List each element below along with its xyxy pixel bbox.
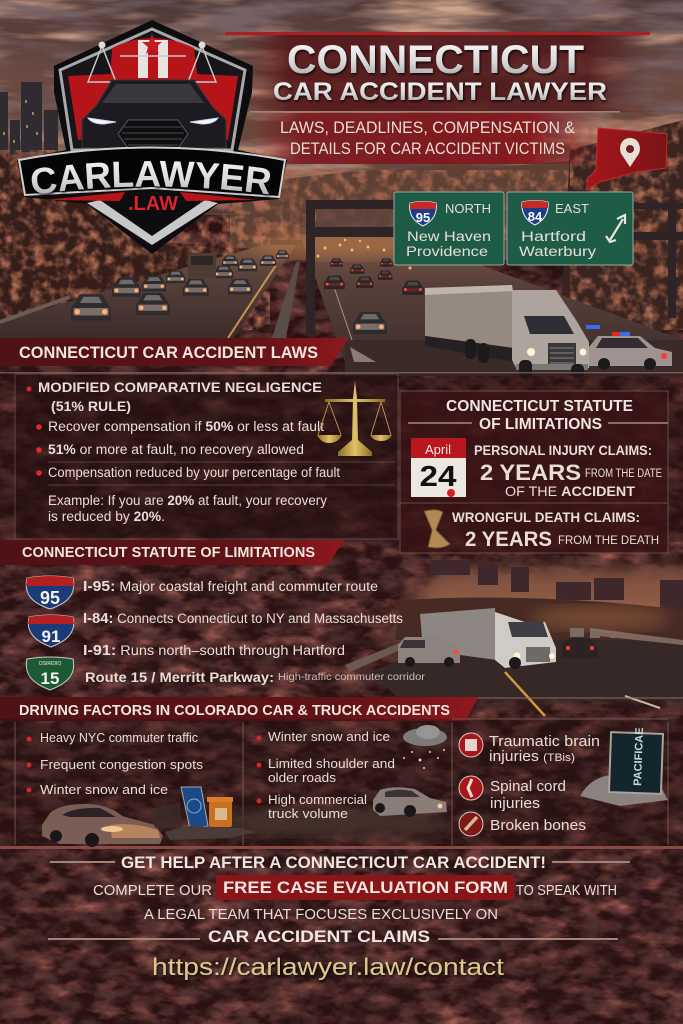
red tail-light car (562, 638, 598, 658)
section heading: Connecticut car accident laws (0, 338, 348, 366)
highway sign: I-84 East: EAST (555, 201, 589, 216)
subtitle band: LAWS, DEADLINES, COMPENSATION & (280, 119, 575, 137)
highway sign: I-84 East: Hartford (521, 229, 586, 244)
icon: calendar April 24: 24 (420, 461, 456, 493)
semi truck (425, 285, 589, 379)
highway sign: I-84 East: Waterbury (519, 244, 596, 259)
shield: I-95 (26, 576, 74, 609)
section: laws and statute background fill (0, 372, 683, 542)
panel heading (446, 398, 633, 433)
factor: older roads (268, 771, 336, 785)
panel heading: OF LIMITATIONS (479, 416, 602, 433)
personal injury claims: FROM THE DATE (585, 468, 662, 480)
section heading: statute of limitations: CONNECTICUT STATUTE OF LIMITATIONS (22, 545, 315, 561)
panel: comparative negligence (15, 374, 398, 539)
illustration: road sign in snow: PACIFICAE (632, 727, 646, 786)
overhead gantry (306, 200, 683, 335)
bullet: 50 percent: Recover compensation if 50% or less at fault (48, 419, 324, 434)
distant town haze (230, 150, 683, 260)
wrongful death claims: FROM THE DEATH (558, 533, 659, 547)
route: I-91 text: I-91: Runs north–south through Hartford (83, 642, 345, 659)
cta line: claims: CAR ACCIDENT CLAIMS (208, 927, 430, 946)
injury text (490, 779, 566, 812)
panel: road factors (256, 725, 447, 821)
injury text: injuries (490, 796, 540, 812)
personal injury claims: OF THE ACCIDENT (505, 483, 635, 499)
injury text: Broken bones (490, 818, 586, 834)
injury text: Traumatic brain (489, 734, 600, 750)
factor: Limited shoulder and (268, 757, 395, 771)
factor: truck volume (268, 807, 348, 821)
negligence heading: MODIFIED COMPARATIVE NEGLIGENCE (38, 379, 322, 395)
route: I-95 text: I-95: Major coastal freight and commuter route (83, 578, 378, 595)
personal injury claims: PERSONAL INJURY CLAIMS: (474, 442, 652, 458)
shield: I-95: 95 (40, 588, 60, 608)
subtitle band: DETAILS FOR CAR ACCIDENT VICTIMS (290, 140, 565, 158)
icon: hourglass (424, 510, 450, 548)
highway surfaces (0, 245, 296, 340)
example: is reduced by 20%. (48, 509, 165, 524)
shield: Route 15: 15 (41, 669, 59, 688)
wrongful death claims: 2 YEARS (465, 528, 552, 551)
left hillside trees (0, 150, 270, 330)
icon: spine injury (459, 776, 483, 800)
highway sign: I-95 North: Providence (406, 244, 488, 259)
cta line: legal team: A LEGAL TEAM THAT FOCUSES EXCLUSIVELY ON (144, 906, 498, 923)
panel: statute of limitations (400, 391, 668, 553)
panel heading: CONNECTICUT STATUTE (446, 398, 633, 415)
police car (586, 325, 672, 370)
route: Route 15 description: High-traffic commuter corridor (278, 671, 426, 683)
injury text: injuries (TBis) (489, 749, 575, 765)
icon: calendar April 24: April (425, 442, 451, 457)
title banner (225, 32, 650, 112)
personal injury claims: 2 YEARS (480, 460, 581, 485)
personal injury claims (474, 442, 662, 499)
panel: traffic factors (26, 731, 255, 847)
section heading: statute of limitations (0, 540, 344, 565)
logo scales (88, 46, 216, 82)
factor (256, 757, 395, 785)
subtitle band (250, 113, 600, 164)
wrongful death claims: WRONGFUL DEATH CLAIMS: (452, 509, 640, 525)
city skyline (0, 82, 58, 155)
shield: I-91 (28, 615, 74, 647)
panel: injuries (459, 727, 668, 836)
road markings and barrier (228, 265, 276, 338)
title: Connecticut: CONNECTICUT (287, 38, 584, 82)
highway section scene (345, 560, 683, 716)
call to action (48, 853, 630, 981)
icon: brain injury (459, 733, 483, 757)
illustration: road sign in snow (580, 727, 668, 806)
bullet: 51 percent: 51% or more at fault, no recovery allowed (48, 442, 304, 457)
cta line: form: COMPLETE OUR (93, 882, 212, 899)
injury text (489, 734, 600, 765)
illustration: silver car (373, 787, 447, 817)
highway sign: I-84 East (507, 192, 633, 265)
example (48, 493, 327, 524)
route: I-84 text: I-84: Connects Connecticut to NY and Massachusetts (83, 610, 403, 627)
title: Car Accident Lawyer: CAR ACCIDENT LAWYER (273, 78, 607, 106)
skyline (430, 560, 683, 610)
contact url: https://carlawyer.law/contact (152, 954, 504, 981)
arrow (606, 215, 625, 242)
route: Route 15 text: Route 15 / Merritt Parkway: (85, 670, 274, 685)
factor: High commercial (268, 793, 367, 807)
injury text: Spinal cord (490, 779, 566, 795)
highway sign: I-95 North: New Haven (407, 229, 491, 244)
wrongful death claims (452, 509, 659, 551)
hero scene: sunset highway (0, 0, 683, 379)
icon: gold scales of justice (317, 381, 392, 456)
shield 84: 84 (528, 209, 543, 224)
list: highway routes (26, 576, 426, 690)
suv (398, 637, 460, 667)
shield 95: 95 (416, 210, 430, 225)
logo: CarLawyer.Law shield (17, 20, 287, 254)
icon: broken bone (459, 812, 483, 836)
factor: Heavy NYC commuter traffic (40, 731, 198, 745)
logo wordmark: CARLAWYER (32, 160, 271, 198)
section heading: Connecticut car accident laws: CONNECTICUT CAR ACCIDENT LAWS (19, 344, 318, 362)
example: Example: If you are 20% at fault, your recovery (48, 493, 327, 508)
shield: Route 15 (26, 657, 74, 690)
traffic (71, 239, 424, 334)
factor: Winter snow and ice (268, 730, 390, 744)
icon: calendar April 24 (411, 438, 466, 497)
illustration: tablet and supplies (150, 787, 255, 840)
highway sign: I-95 North: NORTH (445, 201, 491, 216)
truck on shoulder (420, 608, 556, 669)
factor (256, 793, 367, 821)
factor: Winter snow and ice (40, 783, 168, 797)
cta line: form (93, 875, 617, 900)
panels band: factors background (0, 719, 683, 849)
highway sign: I-95 North (394, 192, 504, 265)
icon: snow cloud (403, 725, 447, 769)
logo: CarLawyer.Law shield: .LAW (128, 193, 178, 215)
shield: I-91: 91 (42, 627, 60, 646)
factor: Frequent congestion spots (40, 758, 203, 772)
cta line: form: TO SPEAK WITH (516, 882, 617, 899)
negligence heading: (51% RULE) (51, 398, 131, 414)
illustration: damaged car (42, 804, 163, 847)
logo car (82, 80, 226, 148)
cta line: form: FREE CASE EVALUATION FORM (223, 878, 508, 897)
section heading: driving factors (0, 697, 683, 721)
shield: Route 15: OSIRIDIO (39, 661, 61, 667)
section heading: driving factors: DRIVING FACTORS IN COLORADO CAR & TRUCK ACCIDENTS (19, 703, 450, 719)
bullet: percentage: Compensation reduced by your percentage of fault (48, 465, 340, 480)
icon: Connecticut map with pin (586, 128, 667, 190)
negligence heading (26, 379, 322, 414)
cta heading: GET HELP AFTER A CONNECTICUT CAR ACCIDENT! (121, 853, 546, 872)
